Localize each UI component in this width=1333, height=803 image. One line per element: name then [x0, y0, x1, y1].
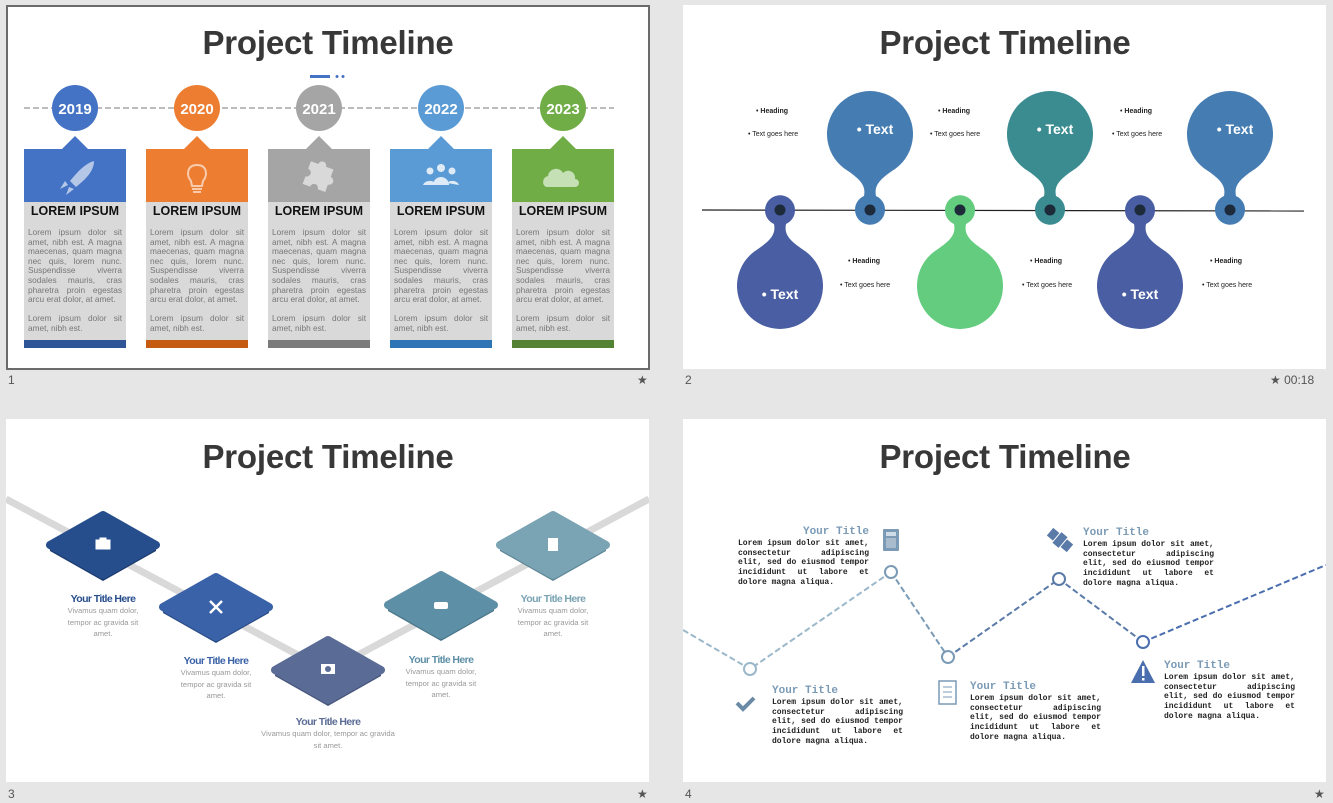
slide 4: dashed zigzag timeline: dolor: [796, 539, 820, 548]
text: LOREM IPSUM: [275, 204, 363, 218]
slide 2 graphics: • Heading: [756, 108, 788, 115]
slide 4: dashed zigzag timeline: sed: [1193, 692, 1208, 701]
slide 4: dashed zigzag timeline: do: [821, 717, 830, 726]
slide 4: dashed zigzag timeline: adipiscing: [855, 708, 903, 717]
slide 4: dashed zigzag timeline: et: [893, 727, 903, 736]
slide 4: dashed zigzag timeline: dolor: [1222, 673, 1246, 682]
slide 4: dashed zigzag timeline: aliqua.: [1032, 733, 1066, 742]
slide 4: dashed zigzag timeline: dolor: [830, 698, 854, 707]
slide 2 graphics: • Heading: [938, 108, 970, 115]
slide 2 graphics: • Heading: [1120, 108, 1152, 115]
slide 4: dashed zigzag timeline: sed: [801, 717, 816, 726]
slide 4: dashed zigzag timeline: adipiscing: [1053, 704, 1101, 713]
slide 4: dashed zigzag timeline: et: [1091, 723, 1101, 732]
slide 4: dashed zigzag timeline: Your Title: [803, 526, 869, 538]
slide 4: dashed zigzag timeline: elit,: [772, 717, 796, 726]
slide 4: dashed zigzag timeline: magna: [1198, 712, 1222, 721]
slide 4: dashed zigzag timeline: sit: [859, 698, 874, 707]
slide 3 graphics: [6, 496, 649, 706]
slide 4: dashed zigzag timeline: sit: [1057, 694, 1072, 703]
text: Lorem ipsum dolor sit amet, nibh est.: [272, 313, 366, 333]
slide 4: dashed zigzag timeline: sed: [767, 558, 782, 567]
slide 1: year cards timeline: [6, 5, 650, 370]
slide 4: dashed zigzag timeline: incididunt: [738, 568, 786, 577]
slide 4: dashed zigzag timeline: ipsum: [767, 539, 791, 548]
text: Lorem ipsum dolor sit amet, nibh est.: [394, 313, 488, 333]
diamond captions: [68, 593, 588, 750]
slide 2 graphics: [702, 91, 1304, 329]
slide 4: dashed zigzag timeline: eiusmod: [1033, 713, 1067, 722]
slide 2 graphics: • Heading: [1210, 258, 1242, 265]
slide 4: dashed zigzag timeline: dolore: [738, 578, 767, 587]
slide 4: dashed zigzag timeline: Lorem: [738, 539, 762, 548]
slide 4: dashed zigzag timeline: labore: [1164, 569, 1193, 578]
slide 4: dashed zigzag timeline: consectetur: [772, 708, 825, 717]
slide 4: dashed zigzag timeline: eiusmod: [1146, 559, 1180, 568]
slide 2 graphics: • Text goes here: [748, 131, 798, 138]
slide 4: dashed zigzag timeline: eiusmod: [835, 717, 869, 726]
slide 4: dashed zigzag timeline: dolor: [1028, 694, 1052, 703]
slide 4: dashed zigzag timeline: elit,: [1164, 692, 1188, 701]
slide 1 graphics: 2020: [180, 101, 214, 118]
slide 4: dashed zigzag timeline: eiusmod: [1227, 692, 1261, 701]
slide 4: dashed zigzag timeline: aliqua.: [1145, 579, 1179, 588]
slide 4: dashed zigzag timeline: elit,: [970, 713, 994, 722]
slide 4: dashed zigzag timeline: labore: [1051, 723, 1080, 732]
slide 4: dashed zigzag timeline: elit,: [1083, 559, 1107, 568]
slide 4: dashed zigzag timeline: incididunt: [1083, 569, 1131, 578]
slide 4: dashed zigzag timeline: consectetur: [1164, 683, 1217, 692]
slide 4: dashed zigzag timeline: ipsum: [1193, 673, 1217, 682]
slide 2 graphics: • Text goes here: [1022, 282, 1072, 289]
slide 4: dashed zigzag timeline: amet,: [879, 698, 903, 707]
slide 4: dashed zigzag timeline: consectetur: [1083, 550, 1136, 559]
text: Lorem ipsum dolor sit amet, nibh est. A magna maecenas, quam magna nec quis, lorem nunc. Suspendisse viverra sodales mauris, cras pharetra proin egestas arcu erat dolor, at amet.: [28, 227, 122, 304]
slide 3: isometric diamonds: Your Title Here: [409, 654, 473, 666]
slide 4: dashed zigzag timeline: Your Title: [1164, 660, 1230, 672]
slide 3 number: 3: [8, 787, 15, 801]
slide 2 title: Project Timeline: [879, 24, 1131, 61]
slide 4: dashed zigzag timeline: adipiscing: [1247, 683, 1295, 692]
slide 2 timing: ★ 00:18: [1270, 373, 1314, 387]
slide 4: dashed zigzag timeline: ut: [1030, 723, 1039, 732]
slide 4: dashed zigzag timeline: magna: [1004, 733, 1028, 742]
slide 1 star: ★: [637, 373, 648, 387]
slide 1 graphics: 2022: [424, 101, 458, 118]
slide 4 star: ★: [1314, 787, 1325, 801]
slide 4: dashed zigzag timeline: Lorem: [772, 698, 796, 707]
slide 4: dashed zigzag timeline: adipiscing: [821, 549, 869, 558]
slide 4: dashed zigzag timeline: do: [1132, 559, 1141, 568]
slide 4: dashed zigzag timeline: ut: [832, 727, 841, 736]
slide 4: dashed zigzag timeline: consectetur: [738, 549, 791, 558]
slide 2 graphics: • Text: [1122, 286, 1159, 302]
slide 4: dashed zigzag timeline: labore: [819, 568, 848, 577]
slide 2 graphics: • Text: [857, 121, 894, 137]
text: Lorem ipsum dolor sit amet, nibh est.: [516, 313, 610, 333]
slide 4: dashed zigzag timeline: magna: [806, 737, 830, 746]
slide 4: dashed zigzag timeline: do: [787, 558, 796, 567]
slide 4: dashed zigzag timeline: tempor: [1185, 559, 1214, 568]
slide 4: dashed zigzag timeline: sit: [1170, 540, 1185, 549]
slide 4: dashed zigzag timeline: eiusmod: [801, 558, 835, 567]
slide 4: dashed zigzag timeline: incididunt: [970, 723, 1018, 732]
slide 4: dashed zigzag timeline: dolore: [1164, 712, 1193, 721]
slide 4: dashed zigzag timeline: dolore: [772, 737, 801, 746]
slide 4: dashed zigzag timeline: ut: [798, 568, 807, 577]
slide 2 graphics: • Text: [762, 286, 799, 302]
slide 3: isometric diamonds: [6, 419, 649, 782]
slide 3 title: Project Timeline: [202, 438, 454, 475]
slide 4: dashed zigzag timeline: ut: [1224, 702, 1233, 711]
slide 4: dashed zigzag timeline: et: [1204, 569, 1214, 578]
slide 2 number: 2: [685, 373, 692, 387]
text: LOREM IPSUM: [397, 204, 485, 218]
slide 4: dashed zigzag timeline: elit,: [738, 558, 762, 567]
slide 4: dashed zigzag timeline: magna: [1117, 579, 1141, 588]
slide 3: isometric diamonds: Your Title Here: [184, 655, 248, 667]
text: Lorem ipsum dolor sit amet, nibh est. A magna maecenas, quam magna nec quis, lorem nunc. Suspendisse viverra sodales mauris, cras pharetra proin egestas arcu erat dolor, at amet.: [150, 227, 244, 304]
slide 4: dashed zigzag timeline: tempor: [874, 717, 903, 726]
slide 4: dashed zigzag timeline: tempor: [1266, 692, 1295, 701]
slide 2 graphics: • Heading: [1030, 258, 1062, 265]
slide 3: isometric diamonds: Vivamus quam dolor, tempor ac gravida sit amet.: [181, 668, 251, 700]
text: Lorem ipsum dolor sit amet, nibh est.: [28, 313, 122, 333]
slide 4: dashed zigzag timeline: labore: [1245, 702, 1274, 711]
slide 4: dashed zigzag timeline: amet,: [1190, 540, 1214, 549]
text: Lorem ipsum dolor sit amet, nibh est. A magna maecenas, quam magna nec quis, lorem nunc. Suspendisse viverra sodales mauris, cras pharetra proin egestas arcu erat dolor, at amet.: [394, 227, 488, 304]
text: Lorem ipsum dolor sit amet, nibh est. A magna maecenas, quam magna nec quis, lorem nunc. Suspendisse viverra sodales mauris, cras pharetra proin egestas arcu erat dolor, at amet.: [272, 227, 366, 304]
slide 4: dashed zigzag timeline: Lorem: [970, 694, 994, 703]
slide 2 graphics: • Text goes here: [1112, 131, 1162, 138]
slide 4: dashed zigzag timeline: [683, 419, 1326, 782]
card headings: [31, 204, 607, 218]
slide 4: dashed zigzag timeline: aliqua.: [834, 737, 868, 746]
slide 3: isometric diamonds: Vivamus quam dolor, tempor ac gravida sit amet.: [261, 729, 395, 750]
text: Lorem ipsum dolor sit amet, nibh est.: [150, 313, 244, 333]
slide 4: dashed zigzag timeline: magna: [772, 578, 796, 587]
slide 4: dashed zigzag timeline: amet,: [1271, 673, 1295, 682]
slide 4: dashed zigzag timeline: sed: [999, 713, 1014, 722]
slide 4: dashed zigzag timeline: Your Title: [970, 681, 1036, 693]
slide 4: dashed zigzag timeline: ut: [1143, 569, 1152, 578]
text: Lorem ipsum dolor sit amet, nibh est. A magna maecenas, quam magna nec quis, lorem nunc. Suspendisse viverra sodales mauris, cras pharetra proin egestas arcu erat dolor, at amet.: [516, 227, 610, 304]
slide 4: dashed zigzag timeline: do: [1213, 692, 1222, 701]
slide 4: dashed zigzag timeline: dolore: [1083, 579, 1112, 588]
slide 4: dashed zigzag timeline: sed: [1112, 559, 1127, 568]
slide 3: isometric diamonds: Your Title Here: [296, 716, 360, 728]
slide 4: dashed zigzag timeline: ipsum: [801, 698, 825, 707]
slide 2 graphics: • Text goes here: [840, 282, 890, 289]
slide 4: dashed zigzag timeline: dolor: [1141, 540, 1165, 549]
slide 4 text blocks: [738, 526, 1295, 746]
text: LOREM IPSUM: [519, 204, 607, 218]
slide 3 star: ★: [637, 787, 648, 801]
slide 3: isometric diamonds: Vivamus quam dolor, tempor ac gravida sit amet.: [406, 667, 476, 699]
card body texts: [28, 227, 610, 333]
slide 1 graphics: 2019: [58, 101, 92, 118]
slide 4: dashed zigzag timeline: et: [1285, 702, 1295, 711]
slide 2: bubble timeline: [683, 5, 1326, 369]
slide 4: dashed zigzag timeline: Your Title: [772, 685, 838, 697]
slide 4: dashed zigzag timeline: aliqua.: [800, 578, 834, 587]
slide 4: dashed zigzag timeline: tempor: [840, 558, 869, 567]
text: LOREM IPSUM: [31, 204, 119, 218]
slide 4: dashed zigzag timeline: consectetur: [970, 704, 1023, 713]
slide 3: isometric diamonds: Vivamus quam dolor, tempor ac gravida sit amet.: [518, 606, 588, 638]
text: LOREM IPSUM: [153, 204, 241, 218]
slide 4: dashed zigzag timeline: adipiscing: [1166, 550, 1214, 559]
slide 2 graphics: • Heading: [848, 258, 880, 265]
slide 3: isometric diamonds: Your Title Here: [521, 593, 585, 605]
slide 1 graphics: 2021: [302, 101, 336, 118]
slide 4 title: Project Timeline: [879, 438, 1131, 475]
slide 4: dashed zigzag timeline: Lorem: [1083, 540, 1107, 549]
slide 4 graphics: [683, 528, 1326, 712]
slide 2 graphics: • Text: [1037, 121, 1074, 137]
slide 2 graphics: • Text: [1217, 121, 1254, 137]
slide 1 title: Project Timeline: [202, 24, 454, 61]
slide 3: isometric diamonds: Vivamus quam dolor, tempor ac gravida sit amet.: [68, 606, 138, 638]
slide 4: dashed zigzag timeline: ipsum: [1112, 540, 1136, 549]
slide 1 graphics: 2023: [546, 101, 580, 118]
slide 4: dashed zigzag timeline: et: [859, 568, 869, 577]
slide 4: dashed zigzag timeline: amet,: [845, 539, 869, 548]
slide 1 graphics: [24, 75, 614, 348]
slide 4 number: 4: [685, 787, 692, 801]
slide 2 graphics: • Text goes here: [1202, 282, 1252, 289]
slide 4: dashed zigzag timeline: amet,: [1077, 694, 1101, 703]
slide 2 graphics: • Text goes here: [930, 131, 980, 138]
slide 3: isometric diamonds: Your Title Here: [71, 593, 135, 605]
slide 4: dashed zigzag timeline: tempor: [1072, 713, 1101, 722]
slide 4: dashed zigzag timeline: Your Title: [1083, 527, 1149, 539]
slide 4: dashed zigzag timeline: sit: [1251, 673, 1266, 682]
slide 4: dashed zigzag timeline: Lorem: [1164, 673, 1188, 682]
slide 4: dashed zigzag timeline: sit: [825, 539, 840, 548]
slide 4: dashed zigzag timeline: do: [1019, 713, 1028, 722]
slide 4: dashed zigzag timeline: labore: [853, 727, 882, 736]
slide 4: dashed zigzag timeline: incididunt: [1164, 702, 1212, 711]
slide 4: dashed zigzag timeline: aliqua.: [1226, 712, 1260, 721]
slide 4: dashed zigzag timeline: incididunt: [772, 727, 820, 736]
slide 1 number: 1: [8, 373, 15, 387]
slide 4: dashed zigzag timeline: dolore: [970, 733, 999, 742]
slide 4: dashed zigzag timeline: ipsum: [999, 694, 1023, 703]
